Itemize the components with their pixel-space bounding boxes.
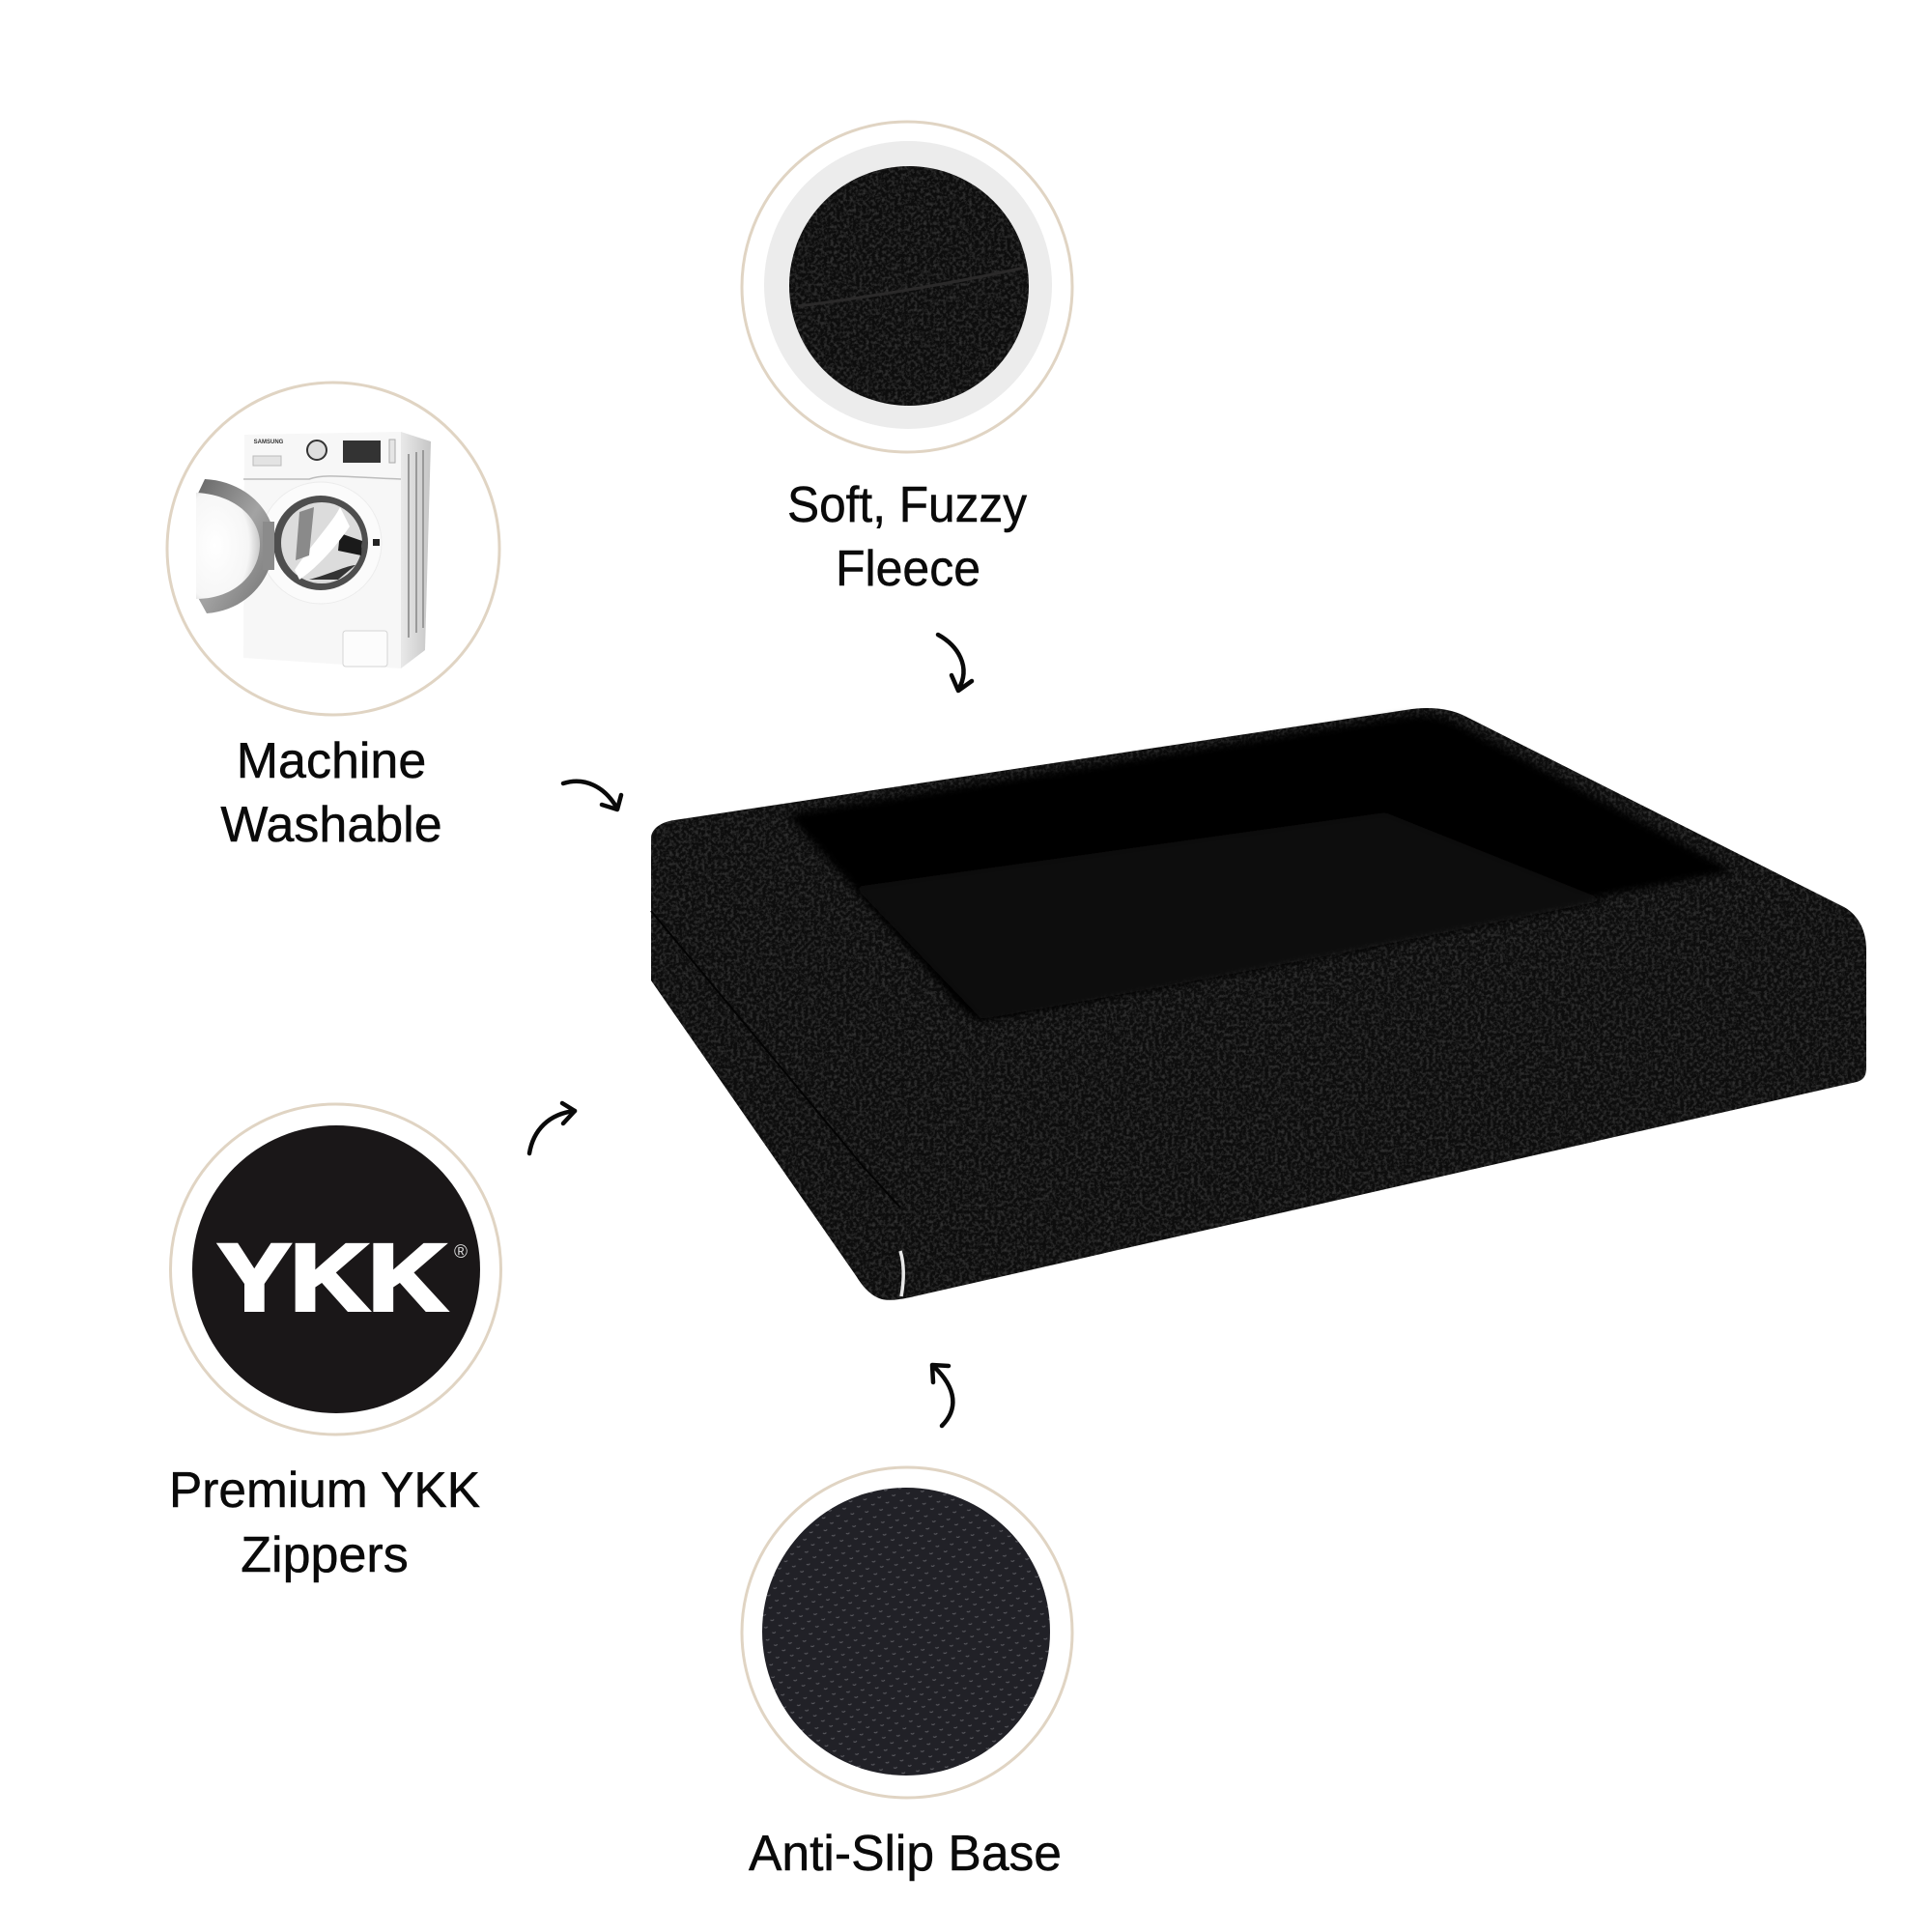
panel: premium YKK zippers [169,1104,500,1583]
circle: anti-slip swatch [742,1467,1072,1798]
badge: YKK logo: YKK [218,1225,446,1330]
front face [243,432,401,668]
label: Premium YKK Zippers: Premium YKK [169,1463,480,1519]
label: Premium YKK Zippers: Zippers [241,1527,409,1583]
door [196,479,274,613]
circle: washing machine [167,383,499,715]
circle: fleece swatch [742,122,1072,452]
circle: washing machine: SAMSUNG [254,440,284,445]
panel: machine washable [167,383,499,853]
label: Anti-Slip Base: Anti-Slip Base [749,1826,1062,1882]
panel: soft fuzzy fleece [742,122,1072,597]
label: Soft, Fuzzy Fleece: Soft, Fuzzy [787,477,1027,533]
label: Machine Washable: Washable [220,797,442,853]
arrow: washable to bed [563,781,621,810]
illustration: dog bed [651,708,1866,1300]
panel: anti-slip base [742,1467,1072,1882]
label: Machine Washable: Machine [237,733,426,789]
arrow: fleece to bed [938,635,972,691]
bed floor [855,812,1605,1019]
arrow: YKK to bed [529,1103,575,1153]
inner well [787,715,1734,1020]
badge: YKK logo: ® [454,1242,468,1263]
label: Soft, Fuzzy Fleece: Fleece [836,541,980,597]
badge: YKK logo [170,1104,500,1435]
arrow: base to bed [932,1365,952,1426]
zipper pull [900,1251,903,1296]
bed body [651,708,1866,1300]
base seam [651,911,900,1208]
